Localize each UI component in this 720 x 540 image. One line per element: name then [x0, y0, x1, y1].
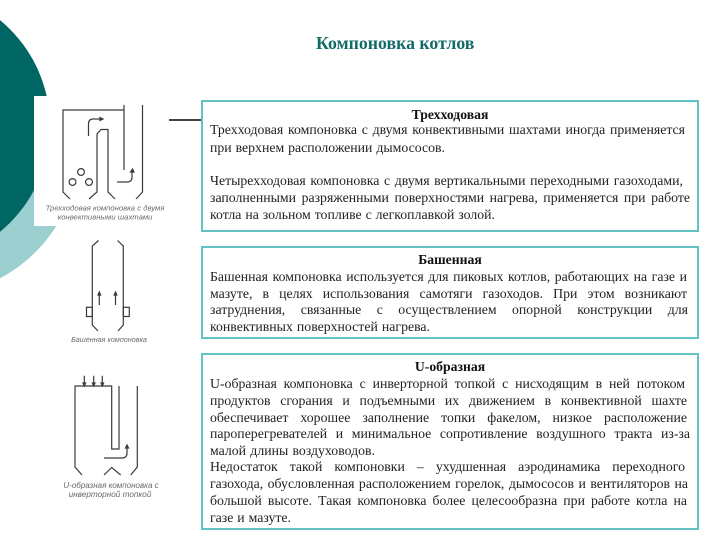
text: tower description: конвективных поверхностей нагрева. — [210, 319, 430, 334]
text: tower description: затруднения, связанные с осуществлением опорной конструкции для — [210, 302, 688, 317]
text: U-shaped description: газе и мазуте. — [210, 510, 291, 525]
panel: tower layout — [201, 246, 699, 339]
text: U-shaped description: Недостаток такой компоновки – ухудшенная аэродинамика переходного — [210, 459, 685, 474]
text: three-pass description: котла на зольном топливе с легкоплавкой золой. — [210, 206, 495, 222]
text: three-pass description: Трехходовая компоновка с двумя конвективными шахтами иногда применяется — [210, 122, 685, 137]
text: three-pass description: Четырехходовая компоновка с двумя вертикальными переходными газоходами, — [210, 173, 683, 188]
text: U-shaped description: малой длины воздуховодов. — [210, 443, 375, 458]
text: tower description: мазуте, в целях использования самотяги газоходов. При этом возникают — [210, 286, 687, 301]
text: U-shaped description: пароперегревателей и минимальное сопротивление воздушного тракта из-за — [210, 426, 690, 441]
diagram: tower layout: Башенная компоновка — [71, 335, 147, 344]
diagram: U-shaped layout: инверторной топкой — [69, 490, 152, 499]
text: U-shaped description: большой высоте. Такая компоновка более целесообразна при работе котла на — [210, 493, 687, 508]
text: U-shaped description: газохода, обусловленная расположением горелок, дымососов и вентиляторов на — [210, 476, 688, 491]
panel: three-pass layout — [201, 100, 699, 232]
panel: U-shaped layout — [201, 353, 699, 530]
heading: tower: Башенная — [418, 252, 482, 267]
diagram: three-pass layout: конвективными шахтами — [58, 212, 153, 222]
heading: three-pass: Трехходовая — [412, 106, 488, 122]
diagram: three-pass layout: Трехходовая компоновка с двумя — [46, 204, 164, 212]
text: three-pass description: при верхнем расположении дымососов. — [210, 140, 445, 154]
text: tower description: Башенная компоновка используется для пиковых котлов, работающих на газе и — [210, 269, 687, 284]
heading: U-shaped: U-образная — [415, 359, 485, 374]
diagram: U-shaped layout: U-образная компоновка с — [63, 481, 159, 490]
text: U-shaped description — [210, 376, 690, 525]
text: tower description — [210, 269, 688, 334]
text: U-shaped description: продуктов сгорания и подъемными их движением в конвективной шахте — [210, 393, 687, 408]
connector line — [169, 119, 202, 120]
title: Компоновка котлов — [316, 32, 474, 52]
decorative background circles — [0, 20, 56, 278]
text: U-shaped description: обеспечивает хорошее заполнение топки факелом, низкое расположение — [210, 410, 687, 425]
text: U-shaped description: U-образная компоновка с инверторной топкой с нисходящим в ней потоком — [210, 376, 685, 391]
text: three-pass description: заполненными разряженными поверхностями нагрева, применяется при работе — [210, 190, 690, 205]
text: three-pass description — [210, 122, 690, 222]
